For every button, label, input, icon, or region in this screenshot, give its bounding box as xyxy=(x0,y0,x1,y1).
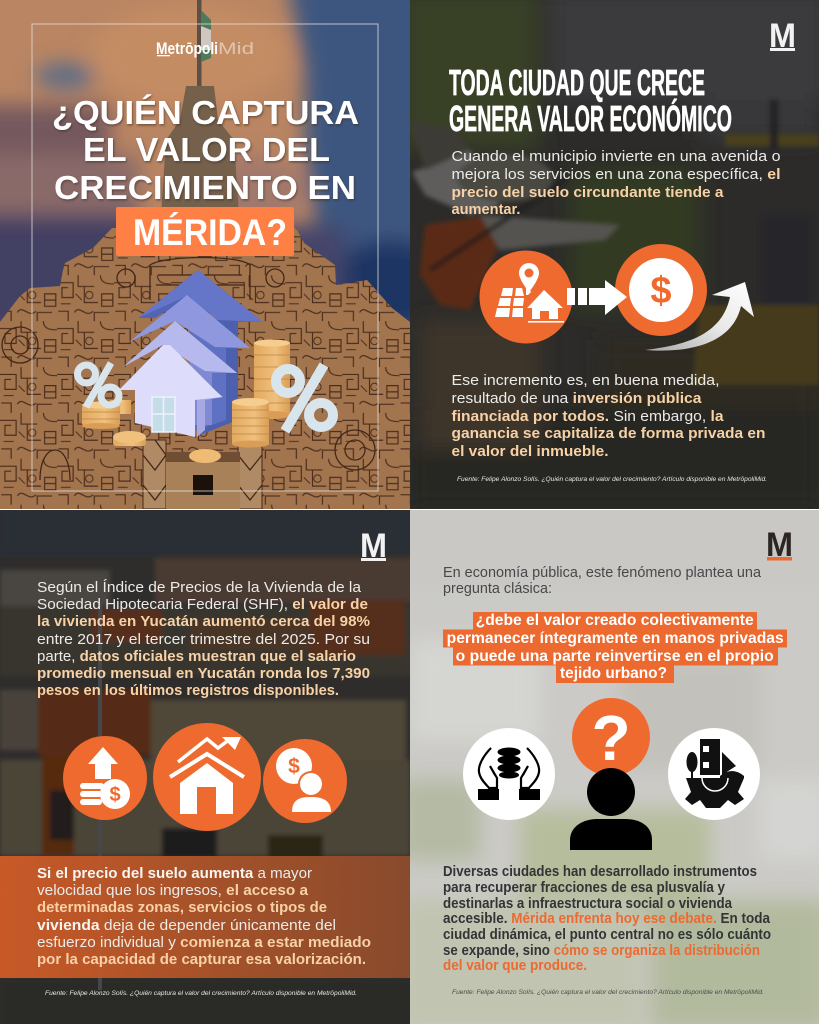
logo: MetrōpoliMid: Mid xyxy=(218,39,254,58)
text: value capture instruments xyxy=(443,864,771,974)
panel: housing and wages in Yucatán xyxy=(0,505,420,1024)
icon: person silhouette xyxy=(570,768,652,850)
text: value capture instruments: accesible. Mérida enfrenta hoy ese debate. En toda xyxy=(443,911,771,927)
illustration: rising houses, coins and percent signs xyxy=(78,270,333,463)
text: municipal investment: mejora los servicios en una zona específica, el xyxy=(452,166,780,183)
text: value capture instruments: destinarlas a infraestructura social o vivienda xyxy=(443,896,733,912)
logo: MetrōpoliMid xyxy=(156,42,253,58)
text: housing value and wages: la vivienda en Yucatán aumentó cerca del 98% xyxy=(37,613,370,630)
title xyxy=(52,94,359,206)
text: municipal investment xyxy=(452,148,780,218)
arrow: land to value xyxy=(567,280,627,315)
text: public investment, private gain: resultado de una inversión pública xyxy=(452,390,702,407)
source note: Fuente: Felipe Alonzo Solís. ¿Quién captura el valor del crecimiento? Artículo disponible en MetrōpoliMid. xyxy=(45,990,357,997)
callout: highlighted question: tejido urbano? xyxy=(560,665,667,682)
text: housing value and wages xyxy=(37,579,370,699)
icon: person and wage xyxy=(263,739,347,823)
text: housing value and wages: promedio mensual en Yucatán ronda los 7,390 xyxy=(37,665,370,682)
icon: question bubble xyxy=(572,698,650,776)
callout: highlighted question xyxy=(443,612,787,683)
panel: the classic question xyxy=(400,500,819,1024)
text: intro xyxy=(443,565,762,597)
text: municipal investment: aumentar. xyxy=(452,201,520,218)
callout: highlighted question: permanecer íntegramente en manos privadas xyxy=(447,630,784,647)
icon: percent left xyxy=(78,363,119,407)
text: housing value and wages: Según el Índice de Precios de la Vivienda de la xyxy=(37,579,362,596)
text: public investment, private gain: el valor del inmueble. xyxy=(452,443,608,460)
logo: M: M xyxy=(769,17,796,55)
callout band: access to housing: esfuerzo individual y comienza a estar mediado xyxy=(37,934,371,951)
text: value capture instruments: del valor que produce. xyxy=(443,958,587,974)
text: housing value and wages: entre 2017 y el tercer trimestre del 2025. Por su xyxy=(37,631,370,648)
callout band: access to housing: vivienda deja de depender únicamente del xyxy=(37,917,336,934)
callout: highlighted question: ¿debe el valor creado colectivamente xyxy=(476,612,754,629)
coin stack rear xyxy=(254,340,290,419)
text: value capture instruments: se expande, sino cómo se organiza la distribución xyxy=(443,943,760,959)
logo: M: M xyxy=(360,527,387,565)
text: housing value and wages: parte, datos oficiales muestran que el salario xyxy=(37,648,356,665)
icon: land plot with location pin and house xyxy=(480,250,572,344)
background: aerial city photo xyxy=(400,500,819,1024)
icon: percent right xyxy=(276,365,333,431)
text: value capture instruments: Diversas ciudades han desarrollado instrumentos xyxy=(443,864,757,880)
logo: M xyxy=(767,532,792,560)
icon: rising money xyxy=(63,736,147,820)
heading xyxy=(449,69,732,132)
text: intro: En economía pública, este fenómeno plantea una xyxy=(443,565,762,581)
icon: rising money: $ xyxy=(109,784,121,806)
text: housing value and wages: Sociedad Hipotecaria Federal (SHF), el valor de xyxy=(37,596,368,613)
callout band: access to housing xyxy=(0,856,410,978)
text: value capture instruments: para recuperar fracciones de esa plusvalía y xyxy=(443,880,725,896)
title: ¿QUIÉN CAPTURA xyxy=(52,94,359,131)
text: public investment, private gain: financiada por todos. Sin embargo, la xyxy=(452,408,724,425)
icon: hands holding coins xyxy=(463,728,555,820)
coin stack left xyxy=(82,400,131,429)
text: municipal investment: precio del suelo circundante tiende a xyxy=(452,184,724,201)
text: public investment, private gain: ganancia se capitaliza de forma privada en xyxy=(452,425,766,442)
callout band: access to housing: Si el precio del suelo aumenta a mayor xyxy=(37,865,312,882)
background: sky and clouds xyxy=(0,0,410,322)
single coins xyxy=(113,431,221,463)
icon: urban infrastructure gear xyxy=(668,728,760,820)
icon: house with rising trend xyxy=(153,723,261,831)
panel: city growth xyxy=(400,0,819,509)
icon: dollar coin xyxy=(615,244,707,336)
text: housing value and wages: pesos en los últimos registros disponibles. xyxy=(37,682,339,699)
background: housing development photo xyxy=(0,505,420,1024)
callout band: access to housing: velocidad que los ingresos, el acceso a xyxy=(37,882,309,899)
house stack xyxy=(119,270,263,437)
icon: question bubble: ? xyxy=(591,702,631,774)
panel: cover xyxy=(0,0,450,509)
text: public investment, private gain xyxy=(452,372,766,460)
arrow: curved upward xyxy=(645,282,754,351)
source note: Fuente: Felipe Alonzo Solís. ¿Quién captura el valor del crecimiento? Artículo disponible en MetrōpoliMid. xyxy=(452,989,764,996)
logo: MetrōpoliMid: Metrōpoli xyxy=(156,39,218,58)
callout band: access to housing: por la capacidad de capturar esa valorización. xyxy=(37,951,366,968)
text: public investment, private gain: Ese incremento es, en buena medida, xyxy=(452,372,720,389)
callout: highlighted question: o puede una parte reinvertirse en el propio xyxy=(456,648,774,665)
icon: dollar coin: $ xyxy=(650,270,672,312)
title highlight: Mérida: MÉRIDA? xyxy=(133,212,287,253)
source note: Fuente: Felipe Alonzo Solís. ¿Quién captura el valor del crecimiento? Artículo disponible en MetrōpoliMid. xyxy=(457,476,767,483)
icon: person and wage: $ xyxy=(288,755,300,778)
callout band: access to housing: determinadas zonas, servicios o tipos de xyxy=(37,899,327,916)
logo: M: M xyxy=(766,526,793,564)
text: intro: pregunta clásica: xyxy=(443,581,552,597)
background: road workers photo xyxy=(400,0,819,509)
title: EL VALOR DEL xyxy=(83,131,330,168)
title: CRECIMIENTO EN xyxy=(54,169,356,206)
logo: M xyxy=(770,24,795,51)
logo: M xyxy=(361,534,386,561)
coin stack front xyxy=(232,398,269,448)
text: value capture instruments: ciudad dinámica, el punto central no es sólo cuánto xyxy=(443,927,771,943)
monument xyxy=(0,0,410,509)
text: municipal investment: Cuando el municipio invierte en una avenida o xyxy=(452,148,780,165)
frame xyxy=(32,24,378,491)
